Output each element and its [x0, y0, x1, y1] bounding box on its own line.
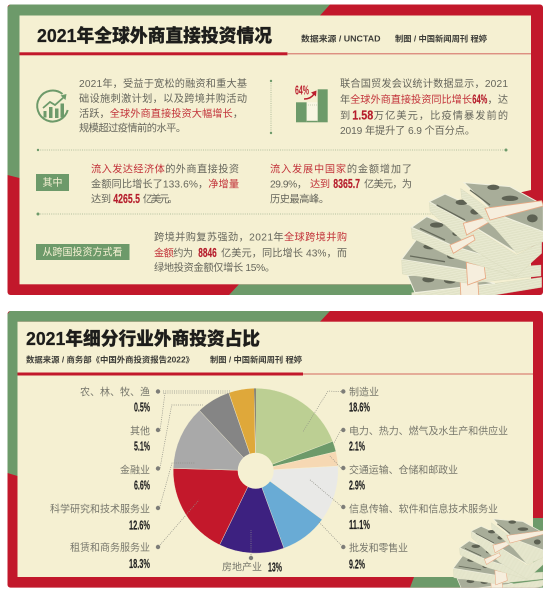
label: other: 5.1% — [134, 438, 150, 454]
badge: cross-border investment — [36, 244, 130, 260]
text block: developed economies: 4265.5 — [113, 191, 140, 206]
text block: developed economies: 亿美元。 — [143, 192, 178, 206]
label: real estate: 13% — [268, 560, 282, 574]
label: manufacturing — [341, 386, 379, 414]
label: manufacturing: 制造业 — [349, 386, 379, 398]
source credit: 数据来源 / 商务部《中国外商投资报告2022》 — [26, 354, 194, 364]
label: electricity, heat, gas and water: 电力、热力、燃气及水生产和供应业 — [349, 424, 508, 438]
label: wholesale and retail — [341, 542, 408, 572]
text block: UN statistics — [340, 77, 508, 137]
text block: developing countries: 8365.7 — [333, 176, 360, 191]
icon: 64% bar comparison: 64% — [295, 82, 309, 98]
label: information technology: 11.1% — [349, 517, 370, 532]
text block: UN statistics: 64% — [472, 92, 488, 106]
label: transport: 2.9% — [349, 478, 365, 492]
text block: developed economies: 金额同比增长了133.6%，净增量 — [91, 178, 239, 190]
text block: developing countries: 29.9%， — [270, 180, 307, 190]
label: science and technology services — [50, 502, 160, 532]
text block: cross-border M&A: 跨境并购复苏强劲，2021年全球跨境并购 — [154, 230, 347, 244]
text block: developed economies: 达到 — [91, 194, 111, 206]
text block: cross-border M&A: 8846 — [198, 245, 217, 260]
label: finance: 6.6% — [134, 478, 150, 492]
label: electricity, heat, gas and water — [341, 424, 508, 454]
label: real estate — [222, 556, 282, 574]
text block: developing countries — [270, 162, 412, 206]
label: transport: 交通运输、仓储和邮政业 — [349, 464, 458, 476]
label: science and technology services: 12.6% — [129, 518, 150, 532]
author credit: 制图 / 中国新闻周刊 程婷 — [210, 354, 302, 364]
leader lines — [160, 391, 341, 555]
label: leasing and business services: 18.3% — [129, 556, 150, 571]
label: real estate: 房地产业 — [222, 560, 262, 574]
text block: developing countries: 历史最高峰。 — [270, 192, 329, 206]
text block: developed economies — [91, 162, 239, 206]
panel: FDI by industry — [8, 311, 544, 593]
label: leasing and business services — [70, 541, 160, 571]
text block: intro: 2021年，受益于宽松的融资和重大基 — [79, 77, 247, 90]
badge: 其中 — [36, 174, 69, 191]
label: science and technology services: 科学研究和技术服务业 — [50, 502, 150, 516]
label: finance: 金融业 — [120, 464, 150, 476]
text block: cross-border M&A: 亿美元，同比增长 43%，而 — [221, 246, 347, 260]
label: electricity, heat, gas and water: 2.1% — [349, 438, 365, 454]
label: agriculture: 0.5% — [134, 400, 150, 414]
text block: developing countries: 亿美元，为 — [364, 178, 412, 190]
pie chart: industry shares — [173, 388, 338, 553]
text block: UN statistics: ，达 — [488, 94, 508, 106]
text block: cross-border M&A — [154, 230, 347, 274]
text block: intro: 活跃，全球外商直接投资大幅增长， — [79, 107, 243, 120]
label: agriculture: 农、林、牧、渔 — [80, 386, 150, 398]
label: information technology — [341, 502, 498, 532]
text block: UN statistics: 联合国贸发会议统计数据显示，2021 — [340, 77, 508, 90]
badge: 其中: 其中 — [42, 176, 62, 189]
text block: cross-border M&A: 金额约为 — [154, 246, 193, 260]
illustration: small stack of banknotes — [453, 519, 544, 593]
heading: panel 2 title: 2021年细分行业外商投资占比 — [26, 328, 260, 349]
text block: intro: 础设施刺激计划，以及跨境并购活动 — [79, 92, 247, 105]
text block: cross-border M&A: 绿地投资金额仅增长 15%。 — [154, 261, 275, 274]
label: manufacturing: 18.6% — [349, 400, 370, 414]
icon: growth chart in circle — [37, 91, 68, 122]
text block: developing countries: 达到 — [310, 178, 330, 190]
label: other — [130, 424, 160, 454]
heading: panel 1 title: 2021年全球外商直接投资情况 — [37, 25, 272, 46]
source credit: 数据来源 / UNCTAD — [301, 34, 381, 44]
label: other: 其他 — [130, 424, 150, 438]
text block: UN statistics: 万亿美元，比疫情暴发前的 — [374, 109, 508, 122]
label: information technology: 信息传输、软件和信息技术服务业 — [349, 502, 498, 516]
label: wholesale and retail: 批发和零售业 — [349, 542, 408, 554]
illustration: stacks of banknotes — [402, 183, 543, 298]
badge: cross-border investment: 从跨国投资方式看 — [42, 246, 122, 258]
author credit: 制图 / 中国新闻周刊 程婷 — [395, 34, 487, 44]
text block: UN statistics: 到 — [340, 110, 350, 122]
text block: developed economies: 流入发达经济体的外商直接投资 — [91, 162, 239, 176]
panel: global FDI overview — [8, 4, 543, 298]
label: agriculture — [80, 386, 160, 414]
label: finance — [120, 464, 160, 492]
text block: UN statistics: 2019 年提升了 6.9 个百分点。 — [340, 124, 475, 137]
text block: intro — [79, 77, 247, 134]
text block: UN statistics: 年全球外商直接投资同比增长 — [340, 93, 472, 106]
label: leasing and business services: 租赁和商务服务业 — [70, 541, 150, 554]
label: wholesale and retail: 9.2% — [349, 556, 365, 572]
text block: intro: 规模超过疫情前的水平。 — [79, 122, 186, 134]
text block: developing countries: 流入发展中国家的金额增加了 — [270, 162, 412, 176]
label: transport — [341, 464, 458, 492]
text block: UN statistics: 1.58 — [352, 108, 373, 122]
icon: 64% bar comparison — [295, 82, 328, 122]
